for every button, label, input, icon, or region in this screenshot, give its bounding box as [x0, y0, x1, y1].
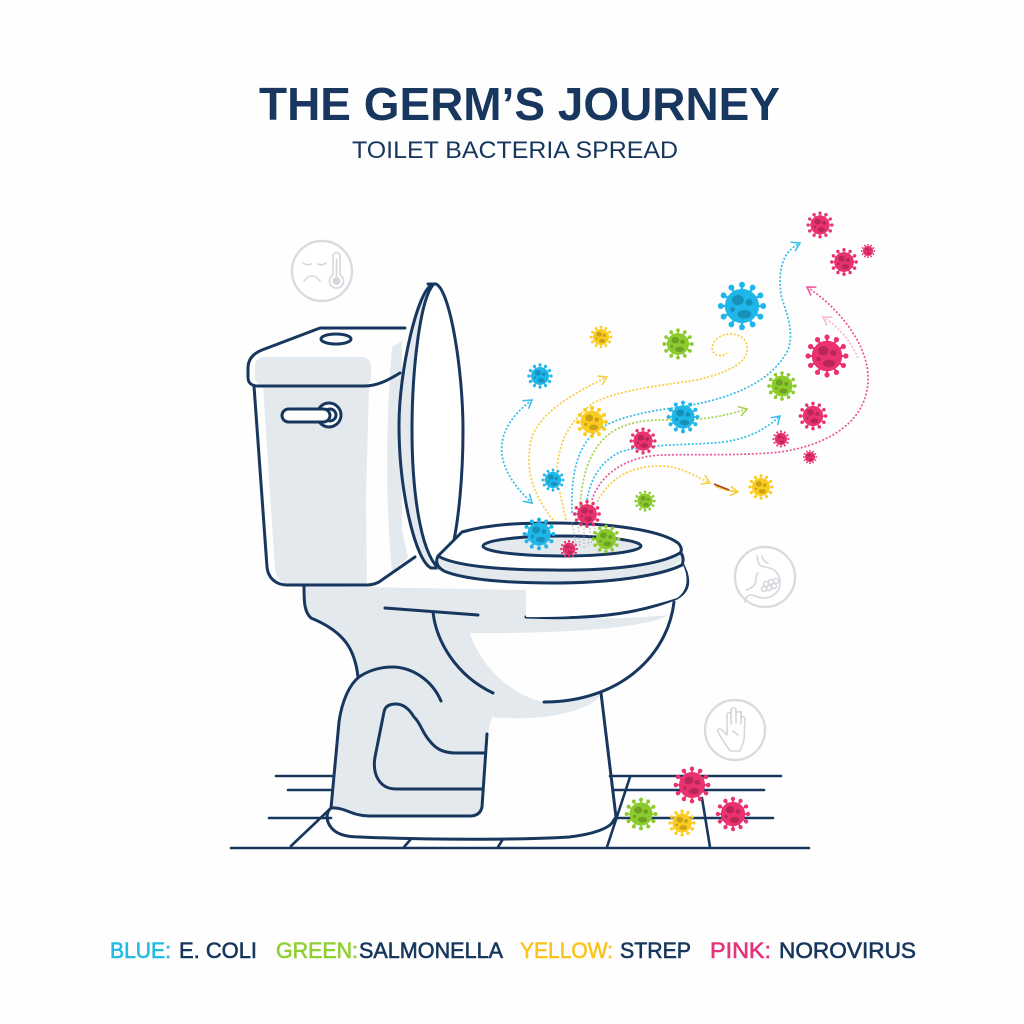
green arrow: [580, 409, 747, 507]
icon: fever face with thermometer: [292, 241, 352, 301]
toilet base and bowl shading: [305, 586, 668, 816]
icon: hand with germs: [705, 700, 765, 760]
legend: [110, 938, 916, 963]
blue lower arrow: [587, 416, 780, 500]
blue germs: [523, 283, 765, 550]
icon: stomach: [735, 547, 795, 607]
yellow arrow tail: [715, 486, 738, 492]
legend: STREP: [620, 938, 691, 963]
blue long arrow: [572, 243, 800, 513]
open toilet lid: [399, 284, 463, 568]
subtitle: TOILET BACTERIA SPREAD: [352, 137, 678, 164]
flush button: [321, 334, 351, 344]
toilet seat and rim: [437, 523, 687, 617]
legend: YELLOW:: [520, 938, 613, 963]
tank lid shading: [255, 357, 371, 386]
germ flight paths: [502, 243, 868, 548]
pale pink arrow: [823, 317, 858, 358]
green germs: [592, 329, 796, 830]
title: THE GERM’S JOURNEY: [259, 78, 780, 130]
yellow germs: [577, 326, 773, 836]
pedestal and trapway outlines: [304, 565, 688, 839]
legend: PINK:: [710, 938, 771, 963]
yellow lower arrow: [597, 466, 710, 502]
toilet tank: [248, 328, 415, 585]
legend: NOROVIRUS: [779, 938, 916, 963]
legend: BLUE:: [110, 938, 171, 963]
dark smudge on arrow tail: [714, 484, 729, 490]
tank body shading: [263, 386, 369, 585]
spray smudge: [572, 520, 595, 548]
seat opening: [483, 536, 641, 556]
toilet: [231, 284, 809, 848]
floor tile lines: [231, 776, 809, 848]
legend: GREEN:: [276, 938, 358, 963]
blue arc arrow: [502, 400, 532, 503]
legend: SALMONELLA: [359, 938, 503, 963]
flush handle: [282, 403, 341, 427]
legend: E. COLI: [179, 938, 257, 963]
yellow spiral path: [557, 334, 747, 520]
pink long arrow: [592, 287, 868, 500]
yellow left arrow: [529, 377, 607, 520]
tank side shading: [387, 341, 408, 571]
pink germs: [560, 212, 875, 830]
